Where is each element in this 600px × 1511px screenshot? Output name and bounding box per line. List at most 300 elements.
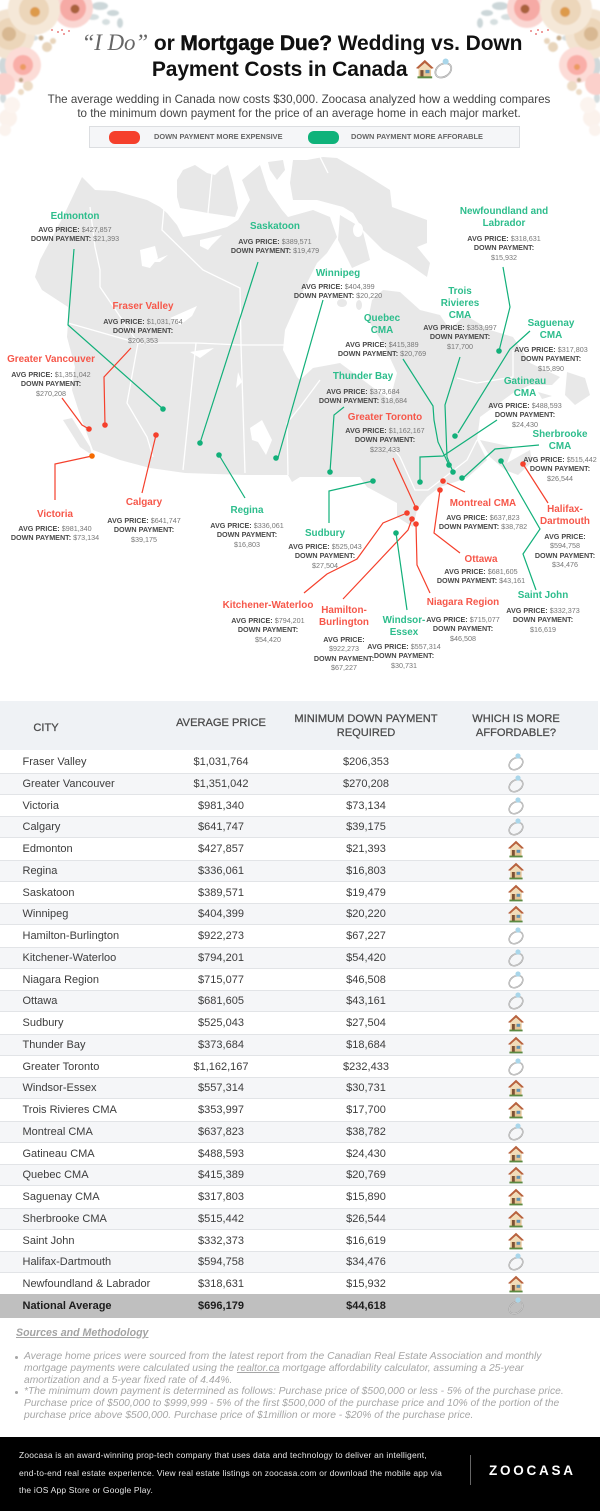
label: Greater Vancouver: Greater Vancouver bbox=[7, 354, 95, 365]
row: Kitchener-Waterloo: $54,420 bbox=[346, 952, 386, 964]
connector: Hamilton-Burlington bbox=[343, 516, 415, 599]
row: Thunder Bay: $373,684 bbox=[198, 1039, 244, 1051]
row: Fraser Valley: $1,031,764 bbox=[193, 756, 249, 768]
label: Montreal CMA: DOWN PAYMENT: $38,782 bbox=[439, 522, 527, 531]
label: Montreal CMA: AVG PRICE: $637,823 bbox=[446, 513, 520, 522]
label: Hamilton-Burlington: Burlington bbox=[319, 617, 369, 628]
connector: Thunder Bay bbox=[327, 407, 344, 475]
label: Hamilton-Burlington bbox=[314, 605, 374, 672]
row: Greater Toronto bbox=[0, 1056, 600, 1077]
label: Ottawa: DOWN PAYMENT: $43,161 bbox=[437, 576, 525, 585]
footer text: Zoocasa is an award-winning prop-tech company that uses data and technology to deliver an intelligent, bbox=[19, 1450, 427, 1460]
row: Greater Vancouver: $1,351,042 bbox=[193, 778, 249, 790]
label: Calgary: Calgary bbox=[126, 497, 162, 508]
label: Trois Rivieres CMA bbox=[423, 286, 497, 351]
connector: Edmonton bbox=[68, 249, 166, 412]
label: Saskatoon: AVG PRICE: $389,571 bbox=[238, 237, 312, 246]
row: National Average bbox=[0, 1294, 600, 1318]
label: Victoria bbox=[11, 509, 99, 542]
connector: Ottawa bbox=[434, 487, 460, 553]
label: Montreal CMA bbox=[439, 498, 527, 531]
label: Quebec CMA bbox=[338, 313, 426, 358]
legend label: green: DOWN PAYMENT MORE AFFORABLE bbox=[351, 132, 483, 141]
row: Halifax-Dartmouth: Halifax-Dartmouth bbox=[22, 1256, 111, 1268]
label: Quebec CMA: Quebec bbox=[364, 313, 400, 324]
footer text: end-to-end real estate experience. View real estate listings on zoocasa.com or download the mobile app via bbox=[19, 1468, 442, 1478]
label: Saint John: Saint John bbox=[518, 590, 568, 601]
row: Saguenay CMA: $15,890 bbox=[346, 1191, 386, 1203]
row: Hamilton-Burlington: $67,227 bbox=[346, 930, 386, 942]
intro text: to the minimum down payment for the price of an average home in each major market. bbox=[77, 107, 521, 120]
legend swatch: red bbox=[109, 131, 140, 144]
row: Calgary: $641,747 bbox=[198, 821, 244, 833]
label: Thunder Bay bbox=[319, 371, 407, 405]
row: Victoria: $73,134 bbox=[346, 800, 386, 812]
label: Halifax-Dartmouth: AVG PRICE: bbox=[544, 532, 586, 541]
table bbox=[0, 701, 600, 1318]
label: Saint John: DOWN PAYMENT: bbox=[513, 615, 573, 624]
row: Winnipeg: Winnipeg bbox=[22, 908, 68, 920]
label: Sudbury: DOWN PAYMENT: bbox=[295, 551, 355, 560]
floral corner: top left bbox=[0, 0, 124, 136]
label: Sherbrooke CMA: DOWN PAYMENT: bbox=[530, 464, 590, 473]
label: Saskatoon: Saskatoon bbox=[250, 221, 300, 232]
row: Ottawa: $681,605 bbox=[198, 995, 244, 1007]
connector: Fraser Valley bbox=[102, 348, 131, 428]
connector: Montreal bbox=[440, 478, 465, 492]
header: down payment: REQUIRED bbox=[337, 727, 395, 739]
label: Gatineau CMA bbox=[488, 376, 562, 429]
label: Fraser Valley bbox=[103, 301, 183, 345]
label: Thunder Bay: AVG PRICE: $373,684 bbox=[326, 387, 400, 396]
label: Niagara Region bbox=[426, 597, 500, 643]
label: Greater Toronto: $232,433 bbox=[370, 445, 400, 454]
label: Greater Toronto: DOWN PAYMENT: bbox=[355, 435, 415, 444]
legend swatch: green bbox=[308, 131, 339, 144]
label: Saguenay CMA: AVG PRICE: $317,803 bbox=[514, 345, 588, 354]
label: Windsor-Essex: Windsor- bbox=[383, 615, 425, 626]
connector: Quebec bbox=[403, 359, 452, 468]
label: Trois Rivieres CMA: $17,700 bbox=[447, 342, 473, 351]
row: Gatineau CMA: $24,430 bbox=[346, 1148, 386, 1160]
header: down payment bbox=[294, 713, 438, 739]
row: Montreal CMA: $38,782 bbox=[346, 1126, 386, 1138]
label: Halifax-Dartmouth: $594,758 bbox=[550, 541, 580, 550]
row: National Average: $44,618 bbox=[346, 1300, 386, 1312]
label: Saskatoon bbox=[231, 221, 319, 255]
label: Fraser Valley: AVG PRICE: $1,031,764 bbox=[103, 317, 183, 326]
label: Saguenay CMA: DOWN PAYMENT: bbox=[521, 354, 581, 363]
header: average price: AVERAGE PRICE bbox=[176, 717, 266, 729]
label: Regina: $16,803 bbox=[234, 540, 260, 549]
lakes and province borders bbox=[140, 223, 363, 455]
label: Edmonton: AVG PRICE: $427,857 bbox=[38, 225, 112, 234]
bullet one: amortization and a 5-year fixed rate of 4.44%. bbox=[24, 1375, 232, 1386]
label: Regina: AVG PRICE: $336,061 bbox=[210, 521, 284, 530]
label: Sherbrooke CMA: AVG PRICE: $515,442 bbox=[523, 455, 597, 464]
row: Newfoundland & Labrador bbox=[0, 1273, 600, 1295]
sources and methodology text bbox=[0, 1351, 600, 1423]
label: Calgary bbox=[107, 497, 181, 544]
row: Sherbrooke CMA bbox=[0, 1208, 599, 1230]
connector: Gatineau bbox=[417, 420, 497, 485]
connector: Halifax-Dartmouth bbox=[520, 461, 548, 503]
label: Regina: Regina bbox=[231, 505, 263, 516]
row: Victoria: $981,340 bbox=[198, 800, 244, 812]
row: Saskatoon bbox=[22, 884, 524, 902]
row: Trois Rivieres CMA: $17,700 bbox=[346, 1104, 386, 1116]
label: Trois Rivieres CMA: Trois bbox=[448, 286, 472, 297]
bullet two: purchase price above $500,000. Purchase price of $1million or more - $20% of the purchase price. bbox=[24, 1410, 473, 1421]
label: Greater Vancouver: AVG PRICE: $1,351,042 bbox=[11, 370, 91, 379]
connector: Saint John bbox=[498, 458, 540, 590]
header: which is more affordable: WHICH IS MORE bbox=[472, 713, 560, 725]
label: Ottawa: AVG PRICE: $681,605 bbox=[444, 567, 518, 576]
label: Winnipeg: DOWN PAYMENT: $20,220 bbox=[294, 291, 382, 300]
label: Windsor-Essex: $30,731 bbox=[391, 661, 417, 670]
row: Saint John: Saint John bbox=[22, 1234, 74, 1246]
label: Halifax-Dartmouth bbox=[535, 504, 595, 569]
label: Sudbury: Sudbury bbox=[305, 528, 345, 539]
row: National Average: $696,179 bbox=[198, 1300, 244, 1312]
label: Montreal CMA: Montreal CMA bbox=[450, 498, 516, 509]
row: Windsor-Essex: $30,731 bbox=[346, 1082, 386, 1094]
table header bbox=[0, 701, 598, 750]
label: Sudbury: AVG PRICE: $525,043 bbox=[288, 542, 362, 551]
row: Halifax-Dartmouth: $34,476 bbox=[346, 1256, 386, 1268]
connector: Regina bbox=[216, 452, 245, 498]
row: Montreal CMA: Montreal CMA bbox=[22, 1126, 93, 1138]
row: Trois Rivieres CMA: Trois Rivieres CMA bbox=[22, 1104, 117, 1116]
row: Sherbrooke CMA: $515,442 bbox=[198, 1213, 244, 1225]
label: Halifax-Dartmouth: DOWN PAYMENT: bbox=[535, 551, 595, 560]
title: Payment Costs in Canada bbox=[152, 58, 407, 81]
label: Sherbrooke CMA: CMA bbox=[549, 441, 571, 452]
label: Sherbrooke CMA: $26,544 bbox=[547, 474, 573, 483]
row: Greater Vancouver: Greater Vancouver bbox=[22, 778, 115, 790]
row: Kitchener-Waterloo: Kitchener-Waterloo bbox=[22, 952, 116, 964]
row: Winnipeg bbox=[0, 903, 599, 925]
row: Newfoundland & Labrador: $15,932 bbox=[346, 1278, 386, 1290]
label: Newfoundland and Labrador: $15,932 bbox=[491, 253, 517, 262]
label: Gatineau CMA: $24,430 bbox=[512, 420, 538, 429]
intro text: The average wedding in Canada now costs $30,000. Zoocasa analyzed how a wedding compares bbox=[48, 93, 550, 106]
label: Fraser Valley: $206,353 bbox=[128, 336, 158, 345]
row: Saint John: $332,373 bbox=[198, 1234, 244, 1246]
row: Gatineau CMA: $488,593 bbox=[198, 1148, 244, 1160]
bullet two: *The minimum down payment is determined as follows: Purchase price of $500,000 or less - 5% of the purchase price. bbox=[24, 1386, 564, 1397]
label: Gatineau CMA: CMA bbox=[514, 388, 536, 399]
label: Windsor-Essex: DOWN PAYMENT: bbox=[374, 651, 434, 660]
label: Ottawa bbox=[437, 554, 525, 585]
row: Sherbrooke CMA: Sherbrooke CMA bbox=[22, 1213, 107, 1225]
header: which is more affordable: AFFORDABLE? bbox=[476, 727, 556, 739]
label: Regina bbox=[210, 505, 284, 549]
label: Newfoundland and Labrador: Labrador bbox=[483, 218, 525, 229]
connector: Victoria bbox=[55, 453, 95, 500]
label: Windsor-Essex: Essex bbox=[390, 627, 418, 638]
row: Thunder Bay: Thunder Bay bbox=[22, 1039, 85, 1051]
connector: Saguenay bbox=[452, 331, 530, 439]
row: Windsor-Essex: Windsor-Essex bbox=[22, 1082, 96, 1094]
footer text bbox=[0, 1437, 460, 1511]
row: Niagara Region: $46,508 bbox=[346, 974, 386, 986]
row: Greater Toronto: $1,162,167 bbox=[193, 1060, 249, 1072]
row: Fraser Valley: $206,353 bbox=[343, 756, 389, 768]
label: Gatineau CMA: DOWN PAYMENT: bbox=[495, 410, 555, 419]
row: Quebec CMA: $20,769 bbox=[346, 1169, 386, 1181]
row: Saguenay CMA: Saguenay CMA bbox=[22, 1191, 100, 1203]
label: Windsor-Essex: AVG PRICE: $557,314 bbox=[367, 642, 441, 651]
row: Quebec CMA: $415,389 bbox=[198, 1169, 244, 1181]
label: Hamilton-Burlington: Hamilton- bbox=[321, 605, 367, 616]
row: Greater Toronto: $232,433 bbox=[343, 1060, 389, 1072]
row: Hamilton-Burlington: $922,273 bbox=[198, 930, 244, 942]
row: Halifax-Dartmouth: $594,758 bbox=[198, 1256, 244, 1268]
row: Regina: Regina bbox=[22, 865, 57, 877]
base map bbox=[35, 157, 590, 527]
label: Niagara Region: $46,508 bbox=[450, 634, 476, 643]
row: Saskatoon: Saskatoon bbox=[22, 886, 74, 898]
intro text bbox=[48, 93, 550, 120]
label: Kitchener-Waterloo: DOWN PAYMENT: bbox=[238, 625, 298, 634]
row: Hamilton-Burlington: Hamilton-Burlington bbox=[22, 930, 119, 942]
label: Niagara Region: DOWN PAYMENT: bbox=[433, 624, 493, 633]
row: National Average: National Average bbox=[22, 1300, 112, 1312]
row: Sudbury bbox=[22, 1014, 524, 1032]
row: Regina: $336,061 bbox=[198, 865, 244, 877]
row: Windsor-Essex bbox=[0, 1077, 599, 1099]
label: Winnipeg bbox=[294, 268, 382, 300]
label: Ottawa: Ottawa bbox=[465, 554, 497, 565]
row: Edmonton bbox=[22, 840, 524, 858]
label: Niagara Region: Niagara Region bbox=[427, 597, 499, 608]
row: Gatineau CMA: Gatineau CMA bbox=[22, 1148, 95, 1160]
label: Windsor-Essex bbox=[367, 615, 441, 670]
label: Quebec CMA: DOWN PAYMENT: $20,769 bbox=[338, 349, 426, 358]
row: Niagara Region bbox=[22, 971, 524, 988]
connector: Winnipeg bbox=[273, 300, 323, 461]
row: Regina: $16,803 bbox=[346, 865, 386, 877]
row: Ottawa: $43,161 bbox=[346, 995, 386, 1007]
label: Greater Vancouver bbox=[7, 354, 95, 398]
row: Gatineau CMA bbox=[0, 1142, 600, 1164]
label: Sudbury bbox=[288, 528, 362, 570]
floral corner: top right bbox=[476, 0, 600, 136]
footer divider bbox=[470, 1455, 471, 1485]
label: Quebec CMA: CMA bbox=[371, 325, 393, 336]
label: Edmonton: Edmonton bbox=[51, 211, 99, 222]
row: Montreal CMA: $637,823 bbox=[198, 1126, 244, 1138]
connector: Kitchener-Waterloo bbox=[304, 510, 410, 593]
label: Kitchener-Waterloo bbox=[223, 600, 313, 644]
label: Sherbrooke CMA: Sherbrooke bbox=[533, 429, 587, 440]
row: Calgary: Calgary bbox=[22, 821, 60, 833]
label: Edmonton bbox=[31, 211, 119, 243]
label: Regina: DOWN PAYMENT: bbox=[217, 530, 277, 539]
row: Saguenay CMA: $317,803 bbox=[198, 1191, 244, 1203]
footer text: the iOS App Store or Google Play. bbox=[19, 1485, 153, 1495]
row: Fraser Valley: Fraser Valley bbox=[22, 756, 86, 768]
row: Windsor-Essex: $557,314 bbox=[198, 1082, 244, 1094]
row: Saguenay CMA bbox=[0, 1186, 600, 1208]
label: Greater Toronto bbox=[345, 412, 425, 454]
row: Hamilton-Burlington bbox=[22, 927, 524, 944]
row: Trois Rivieres CMA: $353,997 bbox=[198, 1104, 244, 1116]
label: Saint John: AVG PRICE: $332,373 bbox=[506, 606, 580, 615]
row: Edmonton: $427,857 bbox=[198, 843, 244, 855]
row: Victoria bbox=[22, 797, 524, 814]
row: Montreal CMA bbox=[0, 1121, 599, 1142]
row: Kitchener-Waterloo: $794,201 bbox=[198, 952, 244, 964]
row: Calgary bbox=[0, 816, 599, 838]
map of Canada with connectors bbox=[35, 157, 590, 610]
row: Edmonton: Edmonton bbox=[22, 843, 73, 855]
connector: Niagara Region bbox=[413, 521, 430, 593]
row: Regina bbox=[0, 860, 599, 882]
label: Sherbrooke CMA bbox=[523, 429, 597, 483]
label: Saguenay CMA: CMA bbox=[540, 330, 562, 341]
row: Trois Rivieres CMA bbox=[0, 1099, 600, 1121]
footer bbox=[0, 1437, 600, 1511]
row: Greater Toronto: Greater Toronto bbox=[22, 1060, 99, 1072]
label: Niagara Region: AVG PRICE: $715,077 bbox=[426, 615, 500, 624]
label: Halifax-Dartmouth: Dartmouth bbox=[540, 516, 590, 527]
row: Fraser Valley bbox=[22, 753, 524, 770]
row: Kitchener-Waterloo bbox=[0, 947, 599, 968]
label: Trois Rivieres CMA: DOWN PAYMENT: bbox=[430, 332, 490, 341]
label: Kitchener-Waterloo: $54,420 bbox=[255, 635, 281, 644]
header: which is more affordable bbox=[472, 713, 560, 739]
row: Calgary: $39,175 bbox=[346, 821, 386, 833]
row: Newfoundland & Labrador: Newfoundland & Labrador bbox=[22, 1278, 150, 1290]
zoocasa logo: ZOOCASA bbox=[489, 1463, 576, 1478]
row: Winnipeg: $404,399 bbox=[198, 908, 244, 920]
bullet one bbox=[0, 1351, 600, 1387]
connector: Trois Rivieres bbox=[445, 357, 460, 475]
label: Hamilton-Burlington: $922,273 bbox=[329, 644, 359, 653]
connector: Newfoundland and Labrador bbox=[496, 267, 510, 354]
label: Greater Vancouver: DOWN PAYMENT: bbox=[21, 379, 81, 388]
connector: Saskatoon bbox=[197, 262, 258, 446]
row: Victoria: Victoria bbox=[22, 800, 59, 812]
label: Kitchener-Waterloo: AVG PRICE: $794,201 bbox=[231, 616, 305, 625]
row: Greater Vancouver: $270,208 bbox=[343, 778, 389, 790]
label: Winnipeg: AVG PRICE: $404,399 bbox=[301, 282, 375, 291]
label: Saguenay CMA: Saguenay bbox=[528, 318, 574, 329]
connector: Greater Vancouver bbox=[62, 398, 92, 432]
row: Thunder Bay bbox=[0, 1034, 599, 1056]
label: Gatineau CMA: AVG PRICE: $488,593 bbox=[488, 401, 562, 410]
label: Trois Rivieres CMA: CMA bbox=[449, 310, 471, 321]
label: Sudbury: $27,504 bbox=[312, 561, 338, 570]
connector: Calgary bbox=[142, 432, 159, 493]
label: Saguenay CMA: $15,890 bbox=[538, 364, 564, 373]
row: Saskatoon: $19,479 bbox=[346, 886, 386, 898]
row: Niagara Region: $715,077 bbox=[198, 974, 244, 986]
label: Fraser Valley: DOWN PAYMENT: bbox=[113, 326, 173, 335]
row: Quebec CMA bbox=[0, 1164, 599, 1186]
label: Hamilton-Burlington: DOWN PAYMENT: bbox=[314, 654, 374, 663]
header: down payment: MINIMUM DOWN PAYMENT bbox=[294, 713, 438, 725]
title: “I Do” or Mortgage Due? Wedding vs. Down bbox=[82, 30, 522, 55]
connector: Sudbury bbox=[329, 478, 376, 523]
title bbox=[82, 30, 522, 81]
row: Sudbury: Sudbury bbox=[22, 1017, 63, 1029]
label: Victoria: DOWN PAYMENT: $73,134 bbox=[11, 533, 99, 542]
label: Newfoundland and Labrador bbox=[460, 206, 548, 262]
label: Newfoundland and Labrador: AVG PRICE: $318,631 bbox=[467, 234, 541, 243]
row: Sherbrooke CMA: $26,544 bbox=[346, 1213, 386, 1225]
bullet two bbox=[0, 1386, 600, 1422]
row: Ottawa bbox=[0, 990, 599, 1012]
label: Saint John bbox=[506, 590, 580, 634]
label: Victoria: Victoria bbox=[37, 509, 73, 520]
label: Gatineau CMA: Gatineau bbox=[504, 376, 546, 387]
label: Quebec CMA: AVG PRICE: $415,389 bbox=[345, 340, 419, 349]
legend label: red: DOWN PAYMENT MORE EXPENSIVE bbox=[154, 132, 283, 141]
row: Sudbury: $27,504 bbox=[346, 1017, 386, 1029]
label: Calgary: $39,175 bbox=[131, 535, 157, 544]
label: Saskatoon: DOWN PAYMENT: $19,479 bbox=[231, 246, 319, 255]
label: Thunder Bay: Thunder Bay bbox=[333, 371, 393, 382]
row: Edmonton: $21,393 bbox=[346, 843, 386, 855]
label: Saguenay CMA bbox=[514, 318, 588, 373]
label: Trois Rivieres CMA: Rivieres bbox=[441, 298, 479, 309]
legend bbox=[89, 126, 520, 148]
label: Trois Rivieres CMA: AVG PRICE: $353,997 bbox=[423, 323, 497, 332]
connector: Greater Toronto bbox=[393, 458, 419, 511]
label: Fraser Valley: Fraser Valley bbox=[113, 301, 173, 312]
row: Greater Vancouver bbox=[0, 773, 599, 794]
label: Edmonton: DOWN PAYMENT: $21,393 bbox=[31, 234, 119, 243]
bullet two: Purchase price of $500,000 to $999,999 - 5% of the first $500,000 of the purchase price and 10% of the portion of the bbox=[24, 1398, 559, 1409]
label: Newfoundland and Labrador: DOWN PAYMENT: bbox=[474, 243, 534, 252]
row: Halifax-Dartmouth bbox=[0, 1251, 599, 1273]
label: Hamilton-Burlington: AVG PRICE: bbox=[323, 635, 365, 644]
label: Newfoundland and Labrador: Newfoundland and bbox=[460, 206, 548, 217]
label: Victoria: AVG PRICE: $981,340 bbox=[18, 524, 92, 533]
label: Calgary: AVG PRICE: $641,747 bbox=[107, 516, 181, 525]
label: Thunder Bay: DOWN PAYMENT: $18,684 bbox=[319, 396, 407, 405]
row: Saint John bbox=[0, 1230, 600, 1251]
bullet one: mortgage payments were calculated using the realtor.ca mortgage affordability calculator, assuming a 25-year bbox=[24, 1363, 524, 1374]
label: Halifax-Dartmouth: Halifax- bbox=[547, 504, 583, 515]
label: Greater Toronto: Greater Toronto bbox=[348, 412, 422, 423]
row: Quebec CMA: Quebec CMA bbox=[22, 1169, 89, 1181]
label: Saint John: $16,619 bbox=[530, 625, 556, 634]
connector: Sherbrooke bbox=[459, 445, 539, 481]
row: Winnipeg: $20,220 bbox=[346, 908, 386, 920]
row: Saint John: $16,619 bbox=[346, 1234, 386, 1246]
header: city: CITY bbox=[33, 722, 59, 734]
row: Thunder Bay: $18,684 bbox=[346, 1039, 386, 1051]
row: Niagara Region: Niagara Region bbox=[22, 974, 99, 986]
label: Winnipeg: Winnipeg bbox=[316, 268, 360, 279]
row: Newfoundland & Labrador: $318,631 bbox=[198, 1278, 244, 1290]
label: Halifax-Dartmouth: $34,476 bbox=[552, 560, 578, 569]
row: Saskatoon: $389,571 bbox=[198, 886, 244, 898]
bullet one: Average home prices were sourced from the latest report from the Canadian Real Estate Association and monthly bbox=[24, 1351, 541, 1362]
connector: Windsor-Essex bbox=[393, 530, 407, 610]
row: Ottawa: Ottawa bbox=[22, 995, 57, 1007]
label: Greater Toronto: AVG PRICE: $1,162,167 bbox=[345, 426, 425, 435]
label: Greater Vancouver: $270,208 bbox=[36, 389, 66, 398]
label: Kitchener-Waterloo: Kitchener-Waterloo bbox=[223, 600, 313, 611]
row: Sudbury: $525,043 bbox=[198, 1017, 244, 1029]
label: Hamilton-Burlington: $67,227 bbox=[331, 663, 357, 672]
label: Calgary: DOWN PAYMENT: bbox=[114, 525, 174, 534]
